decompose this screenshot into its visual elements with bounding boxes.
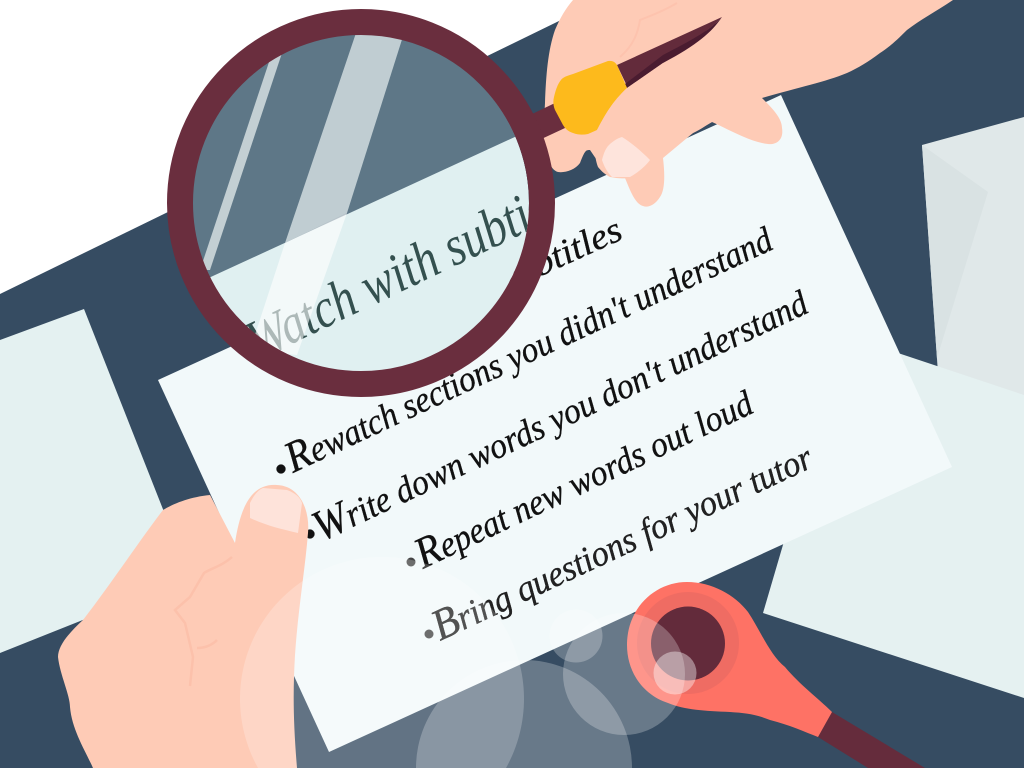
hand crease [620, 3, 677, 57]
tip: write down words: Write down words you don't understand [304, 276, 816, 551]
translucent bubbles [240, 557, 697, 768]
panel: main paper note [158, 95, 952, 752]
reflection over paper [250, 213, 347, 355]
red spoon tool [627, 582, 925, 768]
panel: left background paper [0, 309, 183, 653]
tip: bring questions: Bring questions for your tutor [424, 430, 820, 650]
thumbnail [250, 488, 302, 533]
tip: repeat new words: Repeat new words out loud [405, 376, 761, 578]
magnified text: Watch with subti [237, 184, 541, 372]
fingernail [602, 137, 650, 177]
panel: lower right background paper [763, 347, 1024, 698]
bottom left hand [58, 485, 308, 768]
reflection over desk [285, 30, 405, 243]
top hand [543, 0, 953, 207]
magnifying lens [193, 35, 529, 371]
top hand front finger [594, 60, 762, 178]
magnifying ring [180, 22, 542, 384]
list of study tips [276, 209, 820, 650]
panel: upper right background paper [922, 117, 1024, 402]
knuckle creases [175, 557, 232, 686]
magnifying glass handle [530, 17, 722, 142]
yellow grip [553, 61, 627, 135]
tip: watch with subtitles: Watch with subtitles [332, 209, 628, 372]
tip: rewatch sections: Rewatch sections you didn't understand [276, 212, 780, 482]
